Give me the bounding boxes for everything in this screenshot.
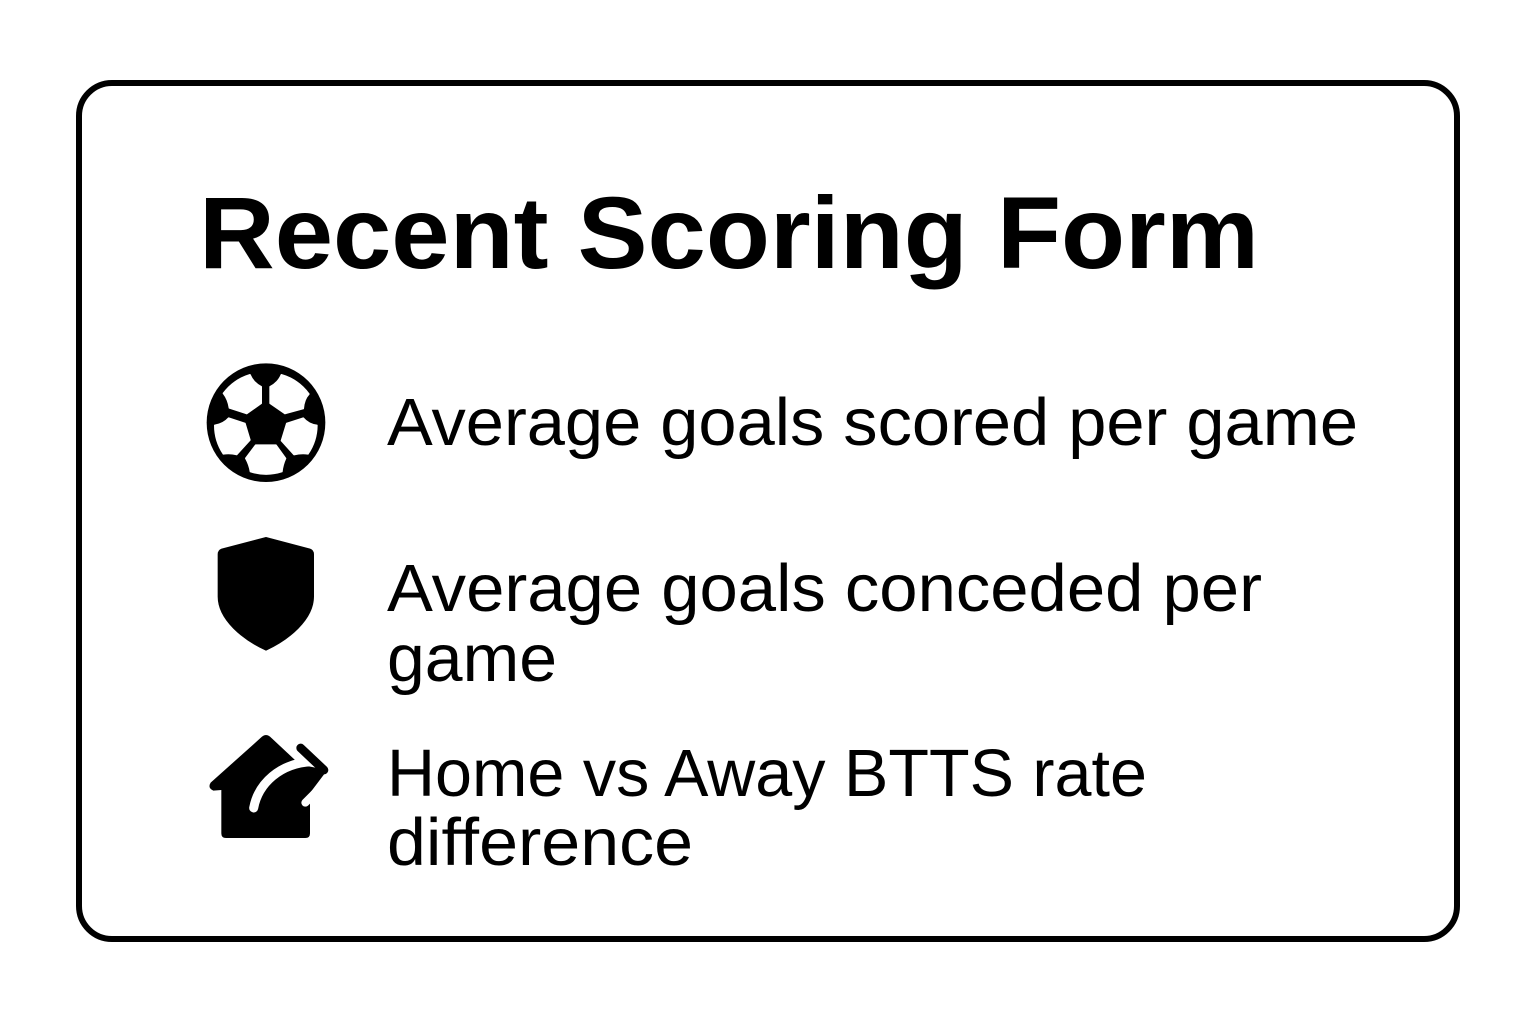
text: home vs away [387,736,1147,880]
text: home vs away: Home vs Away BTTS rate [387,736,1147,811]
icon: soccer ball [207,363,325,482]
text: average goals conceded [387,551,1262,696]
icon: house with arrow [209,735,327,838]
title: Recent Scoring Form [199,176,1259,290]
text: average goals conceded: Average goals conceded per [387,551,1262,626]
text: average goals conceded: game [387,621,557,696]
panel: card outline [79,83,1457,939]
text: home vs away: difference [387,805,693,880]
text: average goals scored: Average goals scored per game [387,385,1358,460]
icon: shield [218,537,314,650]
